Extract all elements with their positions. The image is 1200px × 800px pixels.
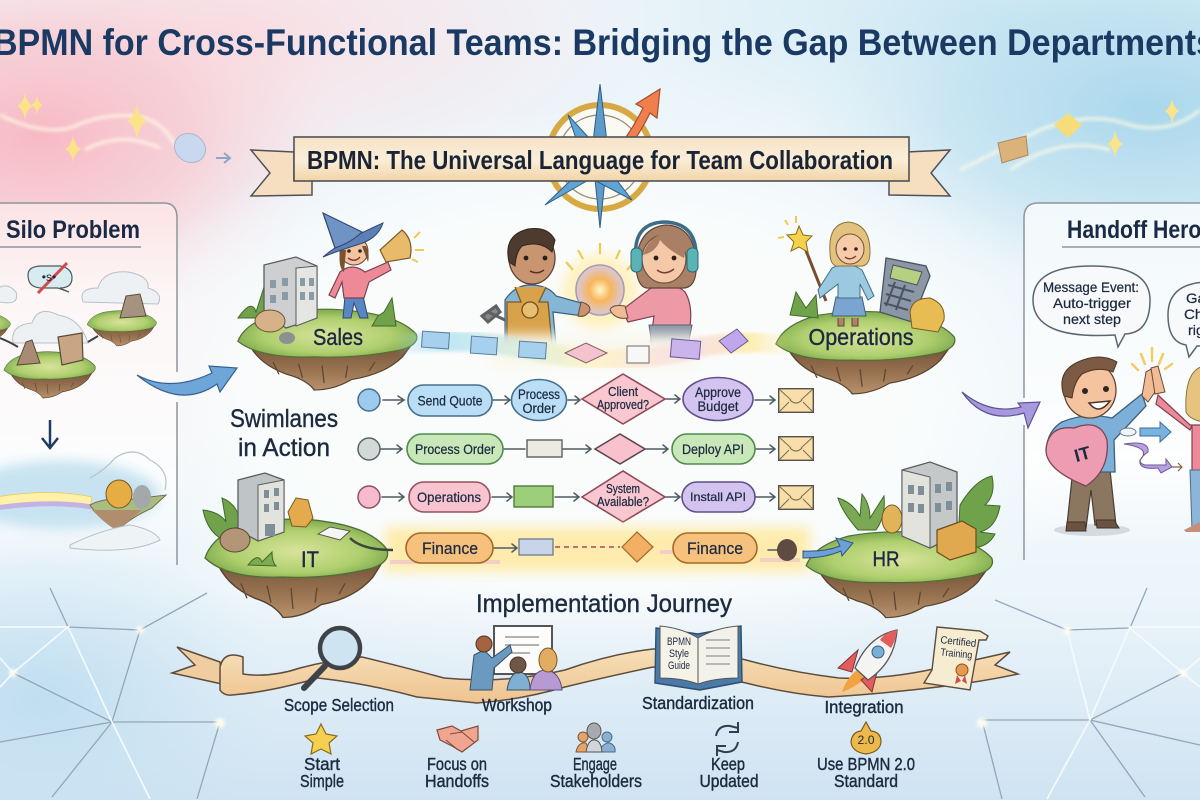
tip: keep updated: Updated: [700, 771, 758, 791]
down arrow: [42, 420, 58, 448]
tip: engage stakeholders: [550, 723, 642, 791]
HR parcel: [937, 521, 976, 560]
icon: certified training scroll: Certified: [940, 634, 977, 650]
HR foliage back: [958, 476, 1000, 548]
icon: magnifier: [304, 628, 360, 688]
banner heading: BPMN: The Universal Language for Team Collaboration: [307, 145, 893, 175]
silo heading: Silo Problem: [6, 216, 140, 244]
icon: BPMN style guide book: BPMN: [667, 636, 691, 648]
banner: [251, 137, 950, 196]
IT label: IT: [301, 547, 319, 572]
swimlane row 4: Finance: [422, 540, 478, 558]
swimlane row 1: [358, 374, 813, 424]
swimlane row 1: Process: [518, 387, 560, 402]
tip: engage stakeholders: Stakeholders: [550, 771, 642, 791]
step labels: Standardization: [642, 693, 754, 713]
speech bubble: message event: Message Event:: [1043, 279, 1139, 295]
tip: use BPMN 2.0 standard: [817, 722, 915, 791]
swimlane row 4: Finance: [687, 540, 743, 558]
swimlane row 3: Install API: [690, 490, 746, 504]
character: man holding IT heart: IT: [1072, 442, 1093, 466]
tip: focus on handoffs: Focus on: [427, 754, 487, 774]
island: operations: [776, 216, 955, 394]
small gray rock: [279, 332, 295, 344]
clouds behind islands: [0, 272, 160, 343]
tip: use BPMN 2.0 standard: 2.0: [858, 735, 874, 747]
swimlane row 2: [358, 434, 813, 464]
rainbow bridge scene: [0, 452, 166, 550]
arrow: silo to swimlanes: [137, 366, 237, 395]
tip: start simple: [300, 724, 344, 791]
silo island: top right: [87, 294, 156, 346]
broken communication bubble: [28, 263, 72, 293]
implementation heading: Implementation Journey: [476, 590, 732, 618]
gold block: [910, 298, 944, 332]
tip: focus on handoffs: Handoffs: [425, 771, 489, 791]
handoff small arrows: [1120, 422, 1182, 473]
swimlane row 1: Approve: [695, 384, 741, 400]
HR building: [902, 462, 957, 548]
swimlane row 3: [358, 471, 813, 522]
swimlane row 3: Available?: [597, 495, 649, 509]
swimlane row 1: Send Quote: [418, 392, 483, 408]
silo island: middle: [4, 333, 95, 398]
icon: BPMN style guide book: [655, 626, 742, 690]
step labels: Workshop: [482, 695, 552, 715]
icon: workshop whiteboard and people: [470, 626, 562, 690]
tip: use BPMN 2.0 standard: Use BPMN 2.0: [817, 754, 915, 774]
grass tufts: [238, 287, 396, 326]
tip: focus on handoffs: [425, 726, 489, 791]
icon: rocket: [838, 630, 897, 692]
speech bubble: message event: next step: [1063, 311, 1121, 327]
icon: BPMN style guide book: Guide: [668, 660, 690, 672]
HR blue arrow: [803, 538, 853, 558]
operations label: Operations: [808, 324, 914, 350]
gold gem: [288, 498, 313, 527]
journey ribbon: [172, 647, 1018, 703]
broken communication bubble: •s•: [42, 270, 56, 284]
swimlane row 2: Process Order: [415, 441, 495, 457]
swimlane row 1: Approved?: [597, 398, 649, 412]
crystal orb glow: [562, 243, 638, 330]
child with star wand: [778, 216, 874, 326]
speech bubble: gateway: [1168, 282, 1200, 357]
swimlane row 2: Deploy API: [682, 441, 744, 457]
arrow: handoff entry: [962, 392, 1040, 428]
wizard child with megaphone: [323, 213, 424, 318]
speech bubble: message event: Auto-trigger: [1053, 295, 1131, 311]
grass tuft: [248, 552, 276, 566]
high-five sparks: [1132, 348, 1172, 370]
swimlane row 1: Client: [608, 385, 638, 399]
swimlane row 3: System: [606, 482, 640, 496]
swimlane row 4: [406, 532, 797, 563]
icon: certified training scroll: [924, 627, 988, 690]
tip: start simple: Simple: [300, 771, 344, 791]
HR label: HR: [872, 548, 900, 571]
calculator: [880, 258, 930, 322]
swimlanes heading: in Action: [238, 434, 330, 462]
character: man holding IT heart: [1046, 357, 1155, 536]
grass tuft: [790, 292, 818, 318]
characters: collaboration pair with crystal orb: [482, 222, 698, 346]
character: woman high five: [1151, 366, 1200, 532]
island: HR: [803, 462, 1000, 618]
decorative crystal web, bottom corners: [0, 588, 1200, 799]
HR gold stone: [882, 505, 902, 533]
building: [264, 257, 317, 328]
IT foliage: [203, 498, 242, 542]
swimlane row 1: Order: [522, 401, 556, 416]
silo island: top left: [0, 312, 10, 347]
panel: handoff heroes: [1024, 203, 1200, 570]
HR plant: [838, 494, 884, 530]
icon: BPMN style guide book: Style: [669, 648, 689, 660]
island: IT: [203, 473, 393, 617]
document and cable: [318, 527, 350, 540]
step labels: [284, 693, 904, 717]
swimlanes heading: [230, 405, 338, 462]
sales label: Sales: [313, 324, 363, 350]
decoration: left sparkle trail: [0, 92, 230, 168]
panel: silo problem: [0, 203, 177, 570]
tip: keep updated: [700, 722, 758, 791]
step labels: Scope Selection: [284, 695, 394, 715]
rainbow path: bottom: [385, 527, 810, 572]
tip: use BPMN 2.0 standard: Standard: [834, 771, 898, 791]
speech bubble: message event: [1033, 266, 1150, 347]
step labels: Integration: [824, 697, 904, 717]
boulder: [255, 310, 285, 332]
swimlane row 1: Budget: [698, 398, 739, 414]
woman with headset: [610, 222, 698, 346]
IT boulder: [220, 528, 250, 552]
tip: engage stakeholders: Engage: [573, 754, 617, 774]
man in apron: [482, 228, 590, 345]
tip: keep updated: Keep: [711, 754, 745, 774]
rainbow path: top: [395, 335, 790, 369]
IT building: [238, 473, 284, 541]
swimlane row 3: Operations: [417, 489, 481, 505]
tip: start simple: Start: [304, 754, 340, 774]
compass with rising arrow: [545, 84, 660, 228]
process flow on top path: [421, 329, 748, 363]
decoration: right sparkle trail: [960, 98, 1200, 170]
icon: certified training scroll: Training: [940, 646, 973, 662]
island: sales: [238, 213, 424, 390]
swimlanes heading: Swimlanes: [230, 405, 338, 433]
